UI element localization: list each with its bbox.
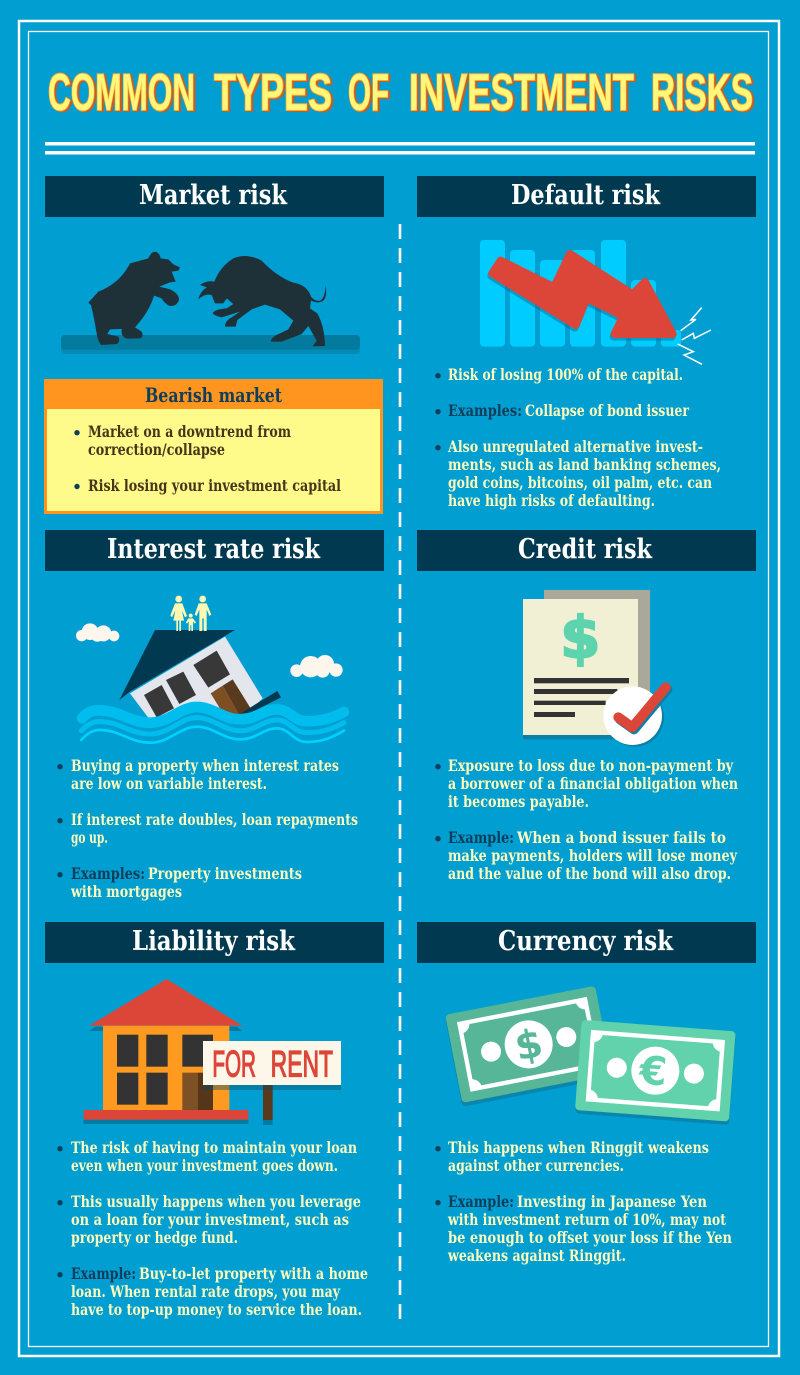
- callout: bearish market: Bearish market: [145, 384, 282, 407]
- icon: credit document with check: $: [560, 604, 600, 671]
- text: credit risk points: [435, 756, 738, 883]
- text: default risk points: [435, 365, 721, 510]
- icon: house for rent: [84, 979, 341, 1125]
- heading: currency risk: [417, 922, 756, 963]
- text: default risk points: Examples:: [448, 401, 522, 420]
- text: currency risk points: This happens when Ringgit weakens: [448, 1138, 709, 1157]
- title: OF: [348, 64, 389, 122]
- heading: default risk: [417, 176, 756, 217]
- text: liability risk points: loan. When rental rate drops, you may: [71, 1282, 341, 1301]
- text: interest rate points: Buying a property when interest rates: [71, 756, 339, 775]
- panel: market risk: [44, 176, 384, 514]
- text: currency risk points: [435, 1138, 732, 1265]
- text: liability risk points: The risk of having to maintain your loan: [71, 1138, 357, 1157]
- text: interest rate points: Property investments: [148, 864, 302, 883]
- heading: credit risk: [417, 530, 756, 571]
- text: currency risk points: Example:: [448, 1192, 514, 1211]
- text: credit risk points: When a bond issuer fails to: [516, 828, 726, 847]
- text: credit risk points: it becomes payable.: [448, 792, 589, 811]
- title: COMMON: [48, 64, 195, 122]
- icon: flooded house: [76, 596, 344, 743]
- panel: currency risk: [417, 922, 756, 1265]
- panel: credit risk: [417, 530, 756, 883]
- heading: default risk: Default risk: [511, 180, 661, 211]
- text: interest rate points: are low on variable interest.: [71, 774, 267, 793]
- text: currency risk points: weakens against Ringgit.: [447, 1246, 626, 1265]
- heading: interest rate risk: Interest rate risk: [107, 534, 321, 565]
- text: interest rate points: go up.: [71, 828, 108, 847]
- panel: liability risk: [45, 922, 384, 1319]
- icon: banknotes: $: [511, 1020, 547, 1071]
- callout: bearish market: Market on a downtrend from: [88, 422, 291, 441]
- panel: interest rate risk: [45, 530, 384, 901]
- heading: currency risk: Currency risk: [498, 926, 674, 957]
- title: TYPES: [214, 64, 332, 122]
- text: credit risk points: and the value of the bond will also drop.: [448, 864, 731, 883]
- text: credit risk points: make payments, holders will lose money: [448, 846, 738, 865]
- text: currency risk points: with investment return of 10%, may not: [447, 1210, 727, 1229]
- icon: house for rent: RENT: [271, 1044, 333, 1085]
- text: interest rate points: If interest rate doubles, loan repayments: [71, 810, 358, 829]
- text: interest rate points: with mortgages: [70, 882, 182, 901]
- panel: default risk: [417, 176, 756, 510]
- text: default risk points: have high risks of defaulting.: [448, 491, 655, 510]
- text: currency risk points: be enough to offset your loss if the Yen: [448, 1228, 732, 1247]
- heading: credit risk: Credit risk: [518, 534, 653, 565]
- title: [48, 64, 753, 122]
- text: default risk points: Risk of losing 100% of the capital.: [448, 365, 683, 384]
- icon: falling arrow chart: [480, 240, 711, 364]
- text: liability risk points: Buy-to-let property with a home: [139, 1264, 368, 1283]
- heading: interest rate risk: [45, 530, 384, 571]
- text: liability risk points: Example:: [71, 1264, 136, 1283]
- text: liability risk points: [57, 1138, 368, 1319]
- text: liability risk points: This usually happens when you leverage: [71, 1192, 361, 1211]
- callout: bearish market: correction/collapse: [88, 440, 225, 459]
- icon: credit document with check: [523, 590, 667, 747]
- text: credit risk points: a borrower of a financial obligation when: [448, 774, 738, 793]
- text: credit risk points: Exposure to loss due to non-payment by: [448, 756, 734, 775]
- text: currency risk points: against other currencies.: [448, 1156, 624, 1175]
- text: default risk points: Also unregulated alternative invest-: [447, 437, 703, 456]
- icon: bear and bull: [61, 252, 360, 354]
- text: interest rate points: [57, 756, 358, 901]
- text: liability risk points: have to top-up money to service the loan.: [71, 1300, 362, 1319]
- text: interest rate points: Examples:: [71, 864, 145, 883]
- heading: market risk: [45, 176, 384, 217]
- text: default risk points: Collapse of bond issuer: [525, 401, 690, 420]
- text: default risk points: gold coins, bitcoins, oil palm, etc. can: [448, 473, 712, 492]
- text: currency risk points: Investing in Japanese Yen: [517, 1192, 707, 1211]
- text: liability risk points: on a loan for your investment, such as: [71, 1210, 349, 1229]
- callout: bearish market: [44, 379, 383, 514]
- heading: liability risk: [45, 922, 384, 963]
- icon: banknotes: €: [637, 1047, 669, 1095]
- icon: house for rent: FOR: [212, 1044, 256, 1085]
- heading: market risk: Market risk: [139, 180, 288, 211]
- title: INVESTMENT: [409, 64, 634, 122]
- text: credit risk points: Example:: [448, 828, 514, 847]
- text: default risk points: ments, such as land banking schemes,: [448, 455, 721, 474]
- callout: bearish market: Risk losing your investment capital: [88, 476, 341, 495]
- text: liability risk points: even when your investment goes down.: [71, 1156, 338, 1175]
- heading: liability risk: Liability risk: [132, 926, 296, 957]
- text: liability risk points: property or hedge fund.: [71, 1228, 238, 1247]
- icon: banknotes: [445, 986, 736, 1125]
